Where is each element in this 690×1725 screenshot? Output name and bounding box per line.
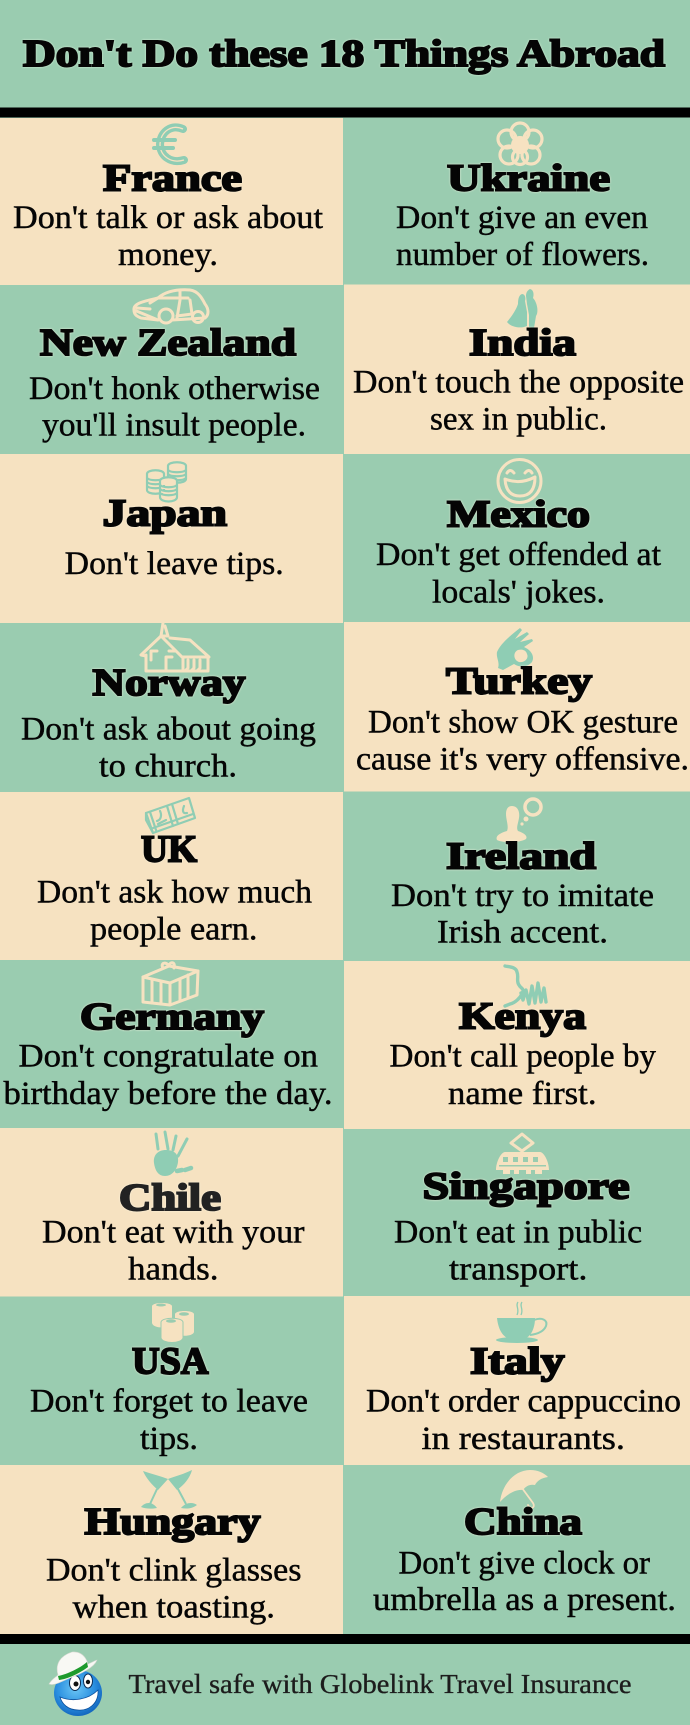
tip: China: Don't give clock or [398,1545,650,1581]
icon: sushi rolls [152,1303,194,1342]
tip: Hungary: Don't clink glasses [46,1553,302,1589]
tip: Singapore: Don't eat in public [394,1215,642,1251]
panel: Norway [0,623,343,792]
header panel [0,0,690,108]
panel: Singapore [344,1129,690,1296]
panel: Kenya [344,961,690,1129]
panel: Turkey [344,622,690,792]
tip: Hungary: when toasting. [72,1589,275,1625]
tip: UK: Don't ask how much [37,875,312,911]
tip: Kenya: Don't call people by [390,1039,656,1075]
panel: UK [0,792,343,960]
heading: Hungary: Hungary [84,1501,260,1543]
tip: France: Don't talk or ask about [13,200,323,236]
heading: Mexico: Mexico [447,494,590,536]
tip: USA: Don't forget to leave [30,1384,308,1420]
panel: USA [0,1296,343,1465]
heading: Ireland: Ireland [446,835,596,877]
panel: India [344,284,690,454]
icon: tram [496,1134,549,1174]
heading: Germany: Germany [80,996,264,1038]
heading: Singapore: Singapore [422,1166,630,1208]
icon: gift box [143,963,198,1005]
tip: New Zealand: Don't honk otherwise [29,371,320,407]
icon: church [141,623,209,671]
tip: Germany: birthday before the day. [4,1076,332,1112]
icon: coastline map squiggle [505,966,546,1006]
panel: China [344,1465,690,1632]
tip: New Zealand: you'll insult people. [42,408,306,444]
tip: Chile: hands. [128,1251,218,1287]
heading: UK: UK [141,829,197,871]
tip: Mexico: locals' jokes. [432,574,605,610]
icon: money bundle [146,798,195,833]
icon: globe mascot with hat [49,1652,102,1716]
panel: Germany [0,960,343,1128]
heading: USA: USA [132,1340,209,1382]
tip: Norway: Don't ask about going [21,711,316,747]
panel: Japan [0,454,343,623]
icon: flower [498,123,542,164]
panel: New Zealand [0,285,343,454]
icon: OK hand gesture [497,628,533,670]
panel: France [0,118,343,285]
footer text: Travel safe with Globelink Travel Insurance [128,1669,632,1699]
icon: umbrella [500,1470,548,1508]
tip: Mexico: Don't get offended at [376,537,661,573]
icon: clinking glasses [141,1470,197,1509]
heading: Ukraine: Ukraine [447,158,610,200]
panel: Chile [0,1128,343,1296]
heading: Italy: Italy [470,1340,564,1382]
icon: euro sign [154,127,184,161]
tip: Norway: to church. [99,749,237,785]
tip: Ireland: Irish accent. [437,915,608,951]
heading: Japan: Japan [102,493,227,535]
heading: India: India [469,322,576,364]
tip: India: sex in public. [430,401,607,437]
tip: Turkey: Don't show OK gesture [368,705,678,741]
icon: coin stacks [147,462,186,502]
tip: Turkey: cause it's very offensive. [356,741,689,777]
tip: China: umbrella as a present. [373,1582,676,1618]
icon: car [134,290,208,323]
icon: person with thought bubble [497,799,541,842]
tip: Italy: Don't order cappuccino [366,1384,681,1420]
heading: Turkey: Turkey [446,660,592,702]
tip: Japan: Don't leave tips. [65,546,284,582]
tip: Ireland: Don't try to imitate [391,878,654,914]
title: Don't Do these 18 Things Abroad [23,33,665,75]
heading: New Zealand: New Zealand [40,322,296,364]
tip: Chile: Don't eat with your [42,1215,304,1251]
icon: hand print [154,1132,191,1176]
panel: Mexico [344,454,690,622]
tip: Ukraine: Don't give an even [396,200,648,236]
panel: Hungary [0,1465,343,1634]
heading: Norway: Norway [92,662,246,704]
panel: Ukraine [344,118,690,284]
tip: USA: tips. [140,1421,198,1457]
icon: smiley [498,460,541,502]
tip: Italy: in restaurants. [422,1421,625,1457]
icon: couple silhouette [507,289,537,328]
heading: France: France [103,158,242,200]
panel: Ireland [344,792,690,961]
panel: Italy [344,1296,690,1465]
tip: India: Don't touch the opposite [353,365,684,401]
footer panel [0,1644,690,1725]
icon: coffee cup [496,1302,546,1343]
heading: Chile: Chile [119,1177,221,1219]
heading: China: China [464,1501,582,1543]
heading: Kenya: Kenya [459,995,586,1037]
tip: UK: people earn. [90,911,258,947]
tip: Germany: Don't congratulate on [18,1039,318,1075]
tip: Singapore: transport. [449,1251,588,1287]
tip: Ukraine: number of flowers. [396,237,649,273]
tip: Kenya: name first. [448,1076,596,1112]
tip: France: money. [118,237,218,273]
